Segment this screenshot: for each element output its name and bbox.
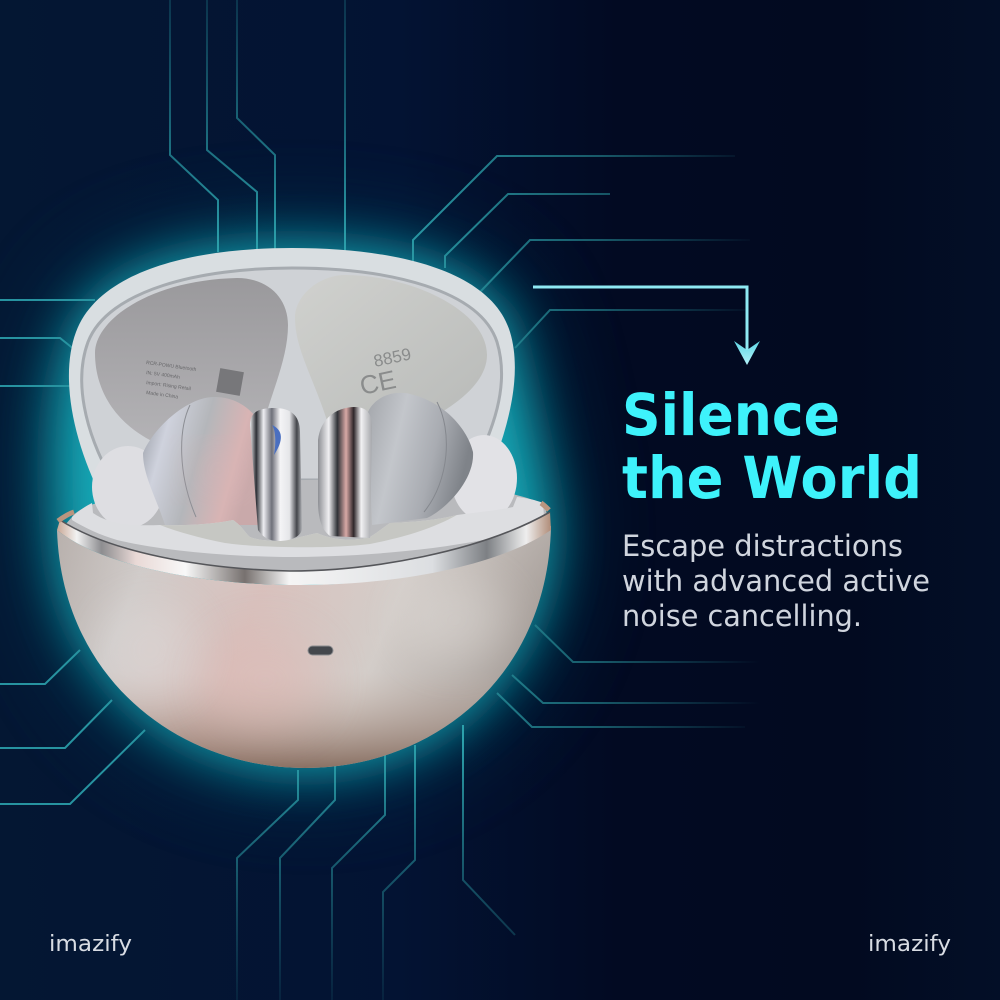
heading: Silence: [622, 381, 840, 449]
left ear tip: [92, 446, 164, 528]
watermark left: imazify: [49, 932, 132, 957]
right earbud body: [368, 393, 473, 525]
right ear tip: [451, 435, 517, 521]
moulded lid text: IN: 5V 400mAh: [146, 370, 180, 381]
circuit lines: right: [413, 156, 785, 727]
body text: noise cancelling.: [622, 599, 862, 633]
moulded lid text: RCR-POWU Bluetooth: [146, 360, 197, 373]
metal ring: [57, 512, 551, 585]
case bowl: [57, 526, 551, 768]
moulded lid text: [146, 360, 197, 400]
body text: Escape distractions: [622, 529, 903, 563]
tray rim: [72, 497, 544, 557]
product: earbuds charging case: [57, 248, 551, 768]
body text: [622, 529, 930, 633]
watermark right: imazify: [868, 932, 951, 957]
tray inner shadow band: [160, 515, 457, 547]
circuit lines: bottom: [237, 725, 515, 1000]
glow behind case: [55, 248, 551, 768]
left earbud stem: [250, 408, 302, 541]
arrow: [533, 287, 760, 365]
bowl shading: [57, 526, 551, 768]
case interior: [65, 480, 548, 572]
heading: the World: [622, 444, 922, 512]
case lid: CE: [357, 364, 399, 401]
left earbud body: [143, 397, 262, 525]
circuit lines: left: [0, 300, 145, 804]
right earbud stem: [318, 407, 372, 538]
LED indicator: [308, 646, 333, 655]
heading: [622, 381, 922, 512]
moulded lid text: Made in China: [146, 390, 179, 400]
circuit lines: top: [170, 0, 345, 252]
moulded lid text: Import: Rising Retail: [146, 380, 191, 392]
case lid: [69, 248, 515, 500]
bowl highlights: [106, 581, 512, 690]
body text: with advanced active: [622, 564, 930, 598]
case lid: 8859: [372, 344, 413, 371]
